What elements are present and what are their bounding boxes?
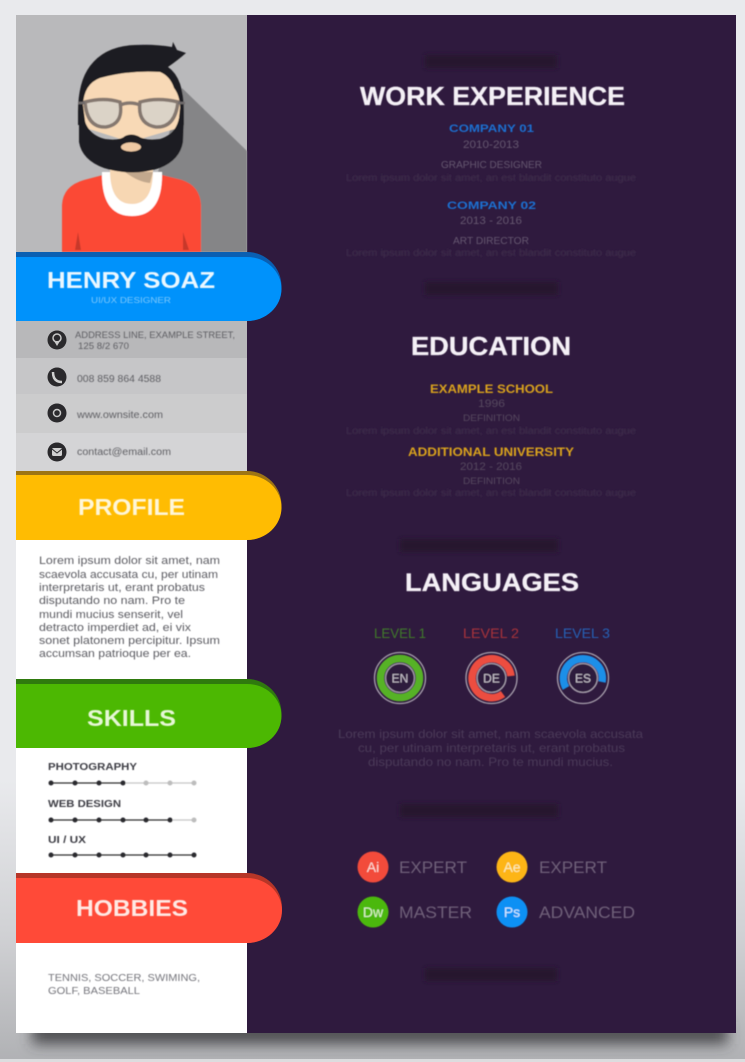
avatar face — [83, 72, 180, 142]
hobbies heading: HOBBIES — [76, 895, 188, 921]
donut: ES — [558, 652, 608, 704]
section: work experience: 2010-2013 — [463, 139, 519, 151]
ribbon: profile — [16, 471, 282, 540]
section: education: 2012 - 2016 — [460, 461, 522, 473]
address text: ADDRESS LINE, EXAMPLE STREET, — [75, 330, 235, 340]
languages text: cu, per utinam interpretaris ut, erant probatus — [358, 741, 625, 755]
skill: web design — [48, 799, 196, 822]
ribbon: hobbies — [16, 873, 282, 943]
skill: photography: PHOTOGRAPHY — [48, 762, 137, 773]
profile body text: detracto imperdiet ad, ei vix — [39, 622, 192, 634]
label: Ai level: EXPERT — [399, 858, 467, 877]
company 02: COMPANY 02 — [447, 200, 536, 212]
badge: Ai — [358, 852, 388, 882]
work experience heading: WORK EXPERIENCE — [360, 81, 625, 111]
skill: web design: WEB DESIGN — [48, 799, 121, 810]
section: work experience: 2013 - 2016 — [460, 215, 522, 227]
hobbies text: GOLF, BASEBALL — [48, 986, 140, 997]
dark smudges on main panel — [400, 55, 558, 981]
address text: 125 8/2 670 — [78, 341, 129, 351]
avatar beard — [79, 118, 184, 172]
label: Ae level: EXPERT — [539, 858, 607, 877]
avatar collar and neck — [102, 172, 162, 216]
profile body text: sonet platonem percipitur. Ipsum — [39, 635, 220, 647]
label: Ps level: ADVANCED — [539, 903, 635, 922]
languages text: disputando no nam. Pro te mundi mucius. — [368, 755, 613, 769]
section: education: Lorem ipsum dolor sit amet, an est blandit constituto augue — [346, 488, 636, 499]
ribbon: name — [16, 252, 282, 321]
section: work experience: Lorem ipsum dolor sit amet, an est blandit constituto augue — [346, 173, 636, 184]
ribbon: skills — [16, 679, 282, 748]
avatar glasses — [78, 100, 185, 127]
phone text: 008 859 864 4588 — [77, 374, 161, 385]
skill: ui/ux: UI / UX — [48, 835, 86, 846]
badge: Ae: Ae — [503, 859, 521, 875]
level labels: LEVEL 2 — [463, 625, 519, 641]
section: education — [346, 331, 636, 499]
hobbies text: TENNIS, SOCCER, SWIMING, — [48, 973, 200, 984]
avatar shadow — [158, 88, 247, 252]
donut: EN — [374, 652, 426, 704]
donut: DE: DE — [483, 672, 500, 686]
skills heading: SKILLS — [87, 705, 176, 731]
badge: Ai: Ai — [367, 859, 379, 875]
website text: www.ownsite.com — [76, 410, 163, 421]
icon: phone — [48, 368, 66, 386]
profile body text: scaevola accusata cu, per utinam — [39, 569, 218, 581]
avatar hair — [78, 42, 186, 125]
donut: ES: ES — [575, 672, 591, 686]
icon: web — [48, 404, 66, 422]
contact details — [48, 330, 235, 462]
additional university: ADDITIONAL UNIVERSITY — [408, 447, 574, 459]
badge: Ps — [496, 896, 528, 928]
section: work experience — [346, 81, 636, 259]
job title: UI/UX DESIGNER — [91, 296, 171, 305]
example school: EXAMPLE SCHOOL — [430, 384, 553, 396]
section: languages — [338, 569, 646, 769]
donut: EN: EN — [392, 672, 408, 686]
section: software skills — [358, 852, 635, 928]
level labels: LEVEL 3 — [555, 625, 610, 641]
badge: Dw: Dw — [363, 904, 384, 920]
company 01: COMPANY 01 — [449, 123, 534, 135]
section: work experience: ART DIRECTOR — [453, 236, 529, 247]
languages text: Lorem ipsum dolor sit amet, nam scaevola accusata — [338, 727, 643, 741]
label: Dw level: MASTER — [399, 903, 472, 922]
profile body text: disputando no nam. Pro te — [39, 595, 185, 607]
level labels — [374, 625, 610, 641]
section: education: DEFINITION — [463, 413, 520, 423]
section: work experience: Lorem ipsum dolor sit amet, an est blandit constituto augue — [346, 248, 636, 259]
illustration: bearded avatar — [62, 42, 247, 252]
badge: Ps: Ps — [504, 904, 520, 920]
panel: sidebar — [16, 15, 247, 1033]
section: education: 1996 — [478, 398, 505, 410]
card drop shadow — [32, 1022, 728, 1044]
level labels: LEVEL 1 — [374, 625, 426, 641]
profile body text: interpretaris ut, erant probatus — [39, 582, 206, 594]
section: education: DEFINITION — [463, 476, 520, 486]
email text: contact@email.com — [77, 447, 171, 458]
profile body text: Lorem ipsum dolor sit amet, nam — [39, 555, 220, 567]
education heading: EDUCATION — [411, 331, 571, 361]
profile body text: accumsan patrioque per ea. — [39, 648, 191, 660]
badge: Dw — [358, 896, 388, 928]
icon: email — [48, 442, 66, 462]
icon: location pin — [48, 330, 66, 350]
skill: photography — [48, 762, 196, 786]
panel: main dark background — [247, 15, 736, 1033]
name heading: HENRY SOAZ — [47, 267, 215, 293]
donut: DE — [466, 652, 517, 704]
skill: ui/ux — [48, 835, 196, 858]
section: education: Lorem ipsum dolor sit amet, an est blandit constituto augue — [346, 426, 636, 437]
avatar shirt — [62, 175, 201, 252]
profile body text: mundi mucius senserit, vel — [39, 609, 183, 621]
languages heading: LANGUAGES — [405, 569, 579, 597]
badge: Ae — [496, 852, 528, 882]
profile heading: PROFILE — [78, 494, 185, 520]
section: work experience: GRAPHIC DESIGNER — [441, 160, 542, 171]
